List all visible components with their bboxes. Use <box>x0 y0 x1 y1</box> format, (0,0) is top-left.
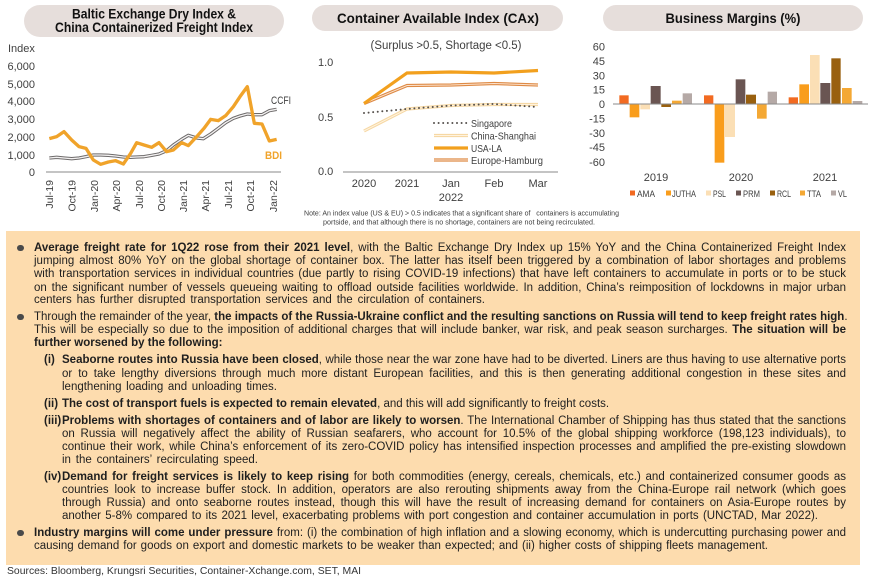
bullet: Russia-Ukraine impacts: This will be especially so due to the imposition of additional charges that will include banker, war risk, and peak season surcharges. The situation will be <box>34 324 846 336</box>
panel: Container Available Index chart <box>304 5 619 226</box>
x axis labels: Jul-19 <box>44 180 56 209</box>
y axis labels: -45 <box>589 142 605 154</box>
y axis labels: 45 <box>593 56 605 68</box>
item (iii) <box>44 414 846 466</box>
heading: Baltic and China freight indices: Baltic Exchange Dry Index & <box>72 6 236 22</box>
item (iv): another 5-8% compared to its 2021 level, exacerbating problems with port congestion and container accumulation in ports (UNCTAD, Mar 2022). <box>62 510 818 522</box>
item (iii): on Russia will negatively affect the ability of Russian seafarers, who account for 10.5% of the global shipping workforce (198,123 individuals), to <box>62 428 846 440</box>
legend: Singapore <box>471 118 512 130</box>
note: Note: An index value (US & EU) > 0.5 indicates that a significant share of containers is accumulating <box>304 208 619 218</box>
item (iv) <box>44 471 846 522</box>
line: BDI <box>49 87 277 164</box>
y axis labels: 3,000 <box>7 114 35 126</box>
y axis labels <box>7 43 35 179</box>
item (i): or to take lengthy diversions through much more distant European facilities, and this is then generating additional congestion in these sites and <box>62 368 846 380</box>
item (i): (i) <box>44 354 55 366</box>
line: CCFI <box>49 109 277 159</box>
x axis labels <box>352 178 548 204</box>
y axis labels: 30 <box>593 70 605 82</box>
panel: Business Margins chart <box>589 5 868 200</box>
heading: Container Available Index: Container Available Index (CAx) <box>337 10 539 26</box>
x axis labels: 2022 <box>439 192 463 204</box>
x axis labels: Feb <box>485 178 503 190</box>
note <box>304 208 619 226</box>
legend: PRM <box>743 189 760 200</box>
x axis labels: Jan-22 <box>268 180 280 212</box>
item (ii): (ii) <box>44 398 58 410</box>
bullet: Russia-Ukraine impacts: further worsened by the following: <box>34 337 222 349</box>
x axis labels: Jul-21 <box>223 180 235 209</box>
item (i): Seaborne routes into Russia have been closed, while those near the war zone have had to be diverted. Liners are thus having to use alternative ports <box>62 354 846 366</box>
y axis labels <box>318 57 333 178</box>
category labels: 2021 <box>813 172 837 184</box>
subtitle: (Surplus >0.5, Shortage <0.5) <box>370 40 522 52</box>
label: CCFI: CCFI <box>271 95 291 107</box>
y axis labels: 60 <box>593 42 605 54</box>
x axis labels <box>44 180 280 212</box>
bullet: Russia-Ukraine impacts <box>17 311 848 349</box>
line: China-Shanghai <box>364 104 538 131</box>
sources: Sources: Bloomberg, Krungsri Securities, Container-Xchange.com, SET, MAI <box>7 566 361 577</box>
x axis labels: Jan-21 <box>178 180 190 212</box>
legend: Europe-Hamburg <box>471 155 543 167</box>
legend: TTA <box>807 189 822 200</box>
y axis labels <box>589 42 605 169</box>
item (ii): The cost of transport fuels is expected to remain elevated, and this will add significantly to freight costs. <box>62 398 609 410</box>
panel: Baltic Exchange Dry Index and CCFI chart <box>7 5 291 212</box>
legend: China-Shanghai <box>471 130 536 142</box>
y axis labels: 1.0 <box>318 57 333 69</box>
bullet: industry margins: Industry margins will come under pressure from: (i) the combination of high inflation and a slowing economy, which is undercutting purchasing power and <box>34 527 846 539</box>
x axis labels: 2020 <box>352 178 376 190</box>
y axis labels: -15 <box>589 114 605 126</box>
bullet: average freight rate: centers has further disrupted transportation services and the circulation of containers. <box>34 294 485 306</box>
item (iii): in the containers’ recirculating speed. <box>62 454 258 466</box>
bullet: industry margins: causing demand for goods on export and domestic markets to be weaker than expected; and (ii) higher costs of shipping fleets management. <box>34 540 768 552</box>
bullet: Russia-Ukraine impacts: Through the remainder of the year, the impacts of the Russia-Ukraine conflict and the resulting sanctions on Russia will tend to keep freight rates high. <box>34 311 848 323</box>
item (iv): countries look to increase buffer stock. In addition, operators are also rerouting shipments away from the China-Europe rail network (which goes <box>62 484 846 496</box>
category labels: 2020 <box>729 172 753 184</box>
y axis labels: 5,000 <box>7 79 35 91</box>
legend: USA-LA <box>471 143 502 155</box>
x axis labels: Apr-20 <box>111 180 123 212</box>
y axis labels: 0 <box>29 167 35 179</box>
x axis labels: Oct-20 <box>156 180 168 212</box>
item (iii): continue their work, while China’s enforcement of its zero-COVID policy has intensified inspection processes and amplified the pre-existing slowdown <box>62 440 846 452</box>
y axis labels: 2,000 <box>7 132 35 144</box>
x axis labels: Jan-20 <box>89 180 101 212</box>
x axis labels: Oct-19 <box>66 180 78 212</box>
x axis labels: Mar <box>529 178 548 190</box>
category labels: 2019 <box>644 172 668 184</box>
y axis labels: 0.5 <box>318 112 333 124</box>
bars <box>619 55 862 163</box>
bullet: average freight rate <box>17 242 846 306</box>
line: USA-LA <box>364 70 538 104</box>
item (i): lengthening loading and unloading times. <box>62 380 277 392</box>
legend: RCL <box>777 189 791 200</box>
legend <box>630 189 847 200</box>
y axis labels: -30 <box>589 128 605 140</box>
legend: AMA <box>637 189 656 200</box>
item (iv): (iv) <box>44 471 61 483</box>
y axis labels: 6,000 <box>7 61 35 73</box>
x axis labels: Jul-20 <box>134 180 146 209</box>
heading: Container Available Index <box>312 5 563 31</box>
legend: JUTHA <box>672 189 697 200</box>
heading: Baltic and China freight indices: China Containerized Freight Index <box>55 20 253 35</box>
label: BDI: BDI <box>265 150 282 162</box>
y axis labels: Index <box>8 43 35 55</box>
x axis labels: Jan <box>442 178 460 190</box>
item (iii): (iii) <box>44 414 61 426</box>
note: portside, and that although there is no shortage, containers are not being recirculated. <box>323 218 595 226</box>
item (iv): Demand for freight services is likely to keep rising for both commodities (energy, cereals, chemicals, etc.) and containerized consumer goods as <box>62 471 846 483</box>
line: Singapore <box>364 104 538 113</box>
item (i) <box>44 354 846 392</box>
category labels <box>644 172 837 184</box>
item (iv): through Russia) and onto seaborne routes instead, though this will have the result of increasing demand for containers on Asia-Europe routes by <box>62 497 846 509</box>
y axis labels: -60 <box>589 157 605 169</box>
bullet: average freight rate: jumping almost 80% YoY on the global shortage of container box. The latter has itself been triggered by a combination of labor shortages and problems <box>34 255 846 267</box>
heading: Business Margins <box>603 5 863 31</box>
bullet: average freight rate: on the significant number of vessels queueing waiting to offload outside facilities worldwide. In addition, China’s reimposition of lockdowns in major urban <box>34 282 846 294</box>
bullet: average freight rate: with transportation services in individual countries (due partly to rising COVID-19 infections) that have left containers to accumulate in ports or to be stuck <box>34 268 846 280</box>
heading: Business Margins: Business Margins (%) <box>666 10 800 26</box>
panel: commentary <box>6 231 860 565</box>
line: Europe-Hamburg <box>364 84 538 104</box>
item (iii): Problems with shortages of containers and of labor are likely to worsen. The International Chamber of Shipping has thus stated that the sanctions <box>62 414 846 426</box>
x axis labels: Apr-21 <box>200 180 212 212</box>
y axis labels: 1,000 <box>7 150 35 162</box>
y axis labels: 15 <box>593 84 605 96</box>
heading: Baltic and China freight indices <box>24 5 284 37</box>
legend <box>434 118 543 167</box>
y axis labels: 0.0 <box>318 166 333 178</box>
x axis labels: Oct-21 <box>245 180 257 212</box>
y axis labels: 0 <box>599 99 605 111</box>
x axis labels: 2021 <box>395 178 419 190</box>
legend: PSL <box>713 189 726 200</box>
bullet: average freight rate: Average freight rate for 1Q22 rose from their 2021 level, with the Baltic Exchange Dry Index up 15% YoY and the China Containerized Freight Index <box>34 242 846 254</box>
legend: VL <box>838 189 847 200</box>
y axis labels: 4,000 <box>7 96 35 108</box>
bullet: industry margins <box>17 527 846 552</box>
